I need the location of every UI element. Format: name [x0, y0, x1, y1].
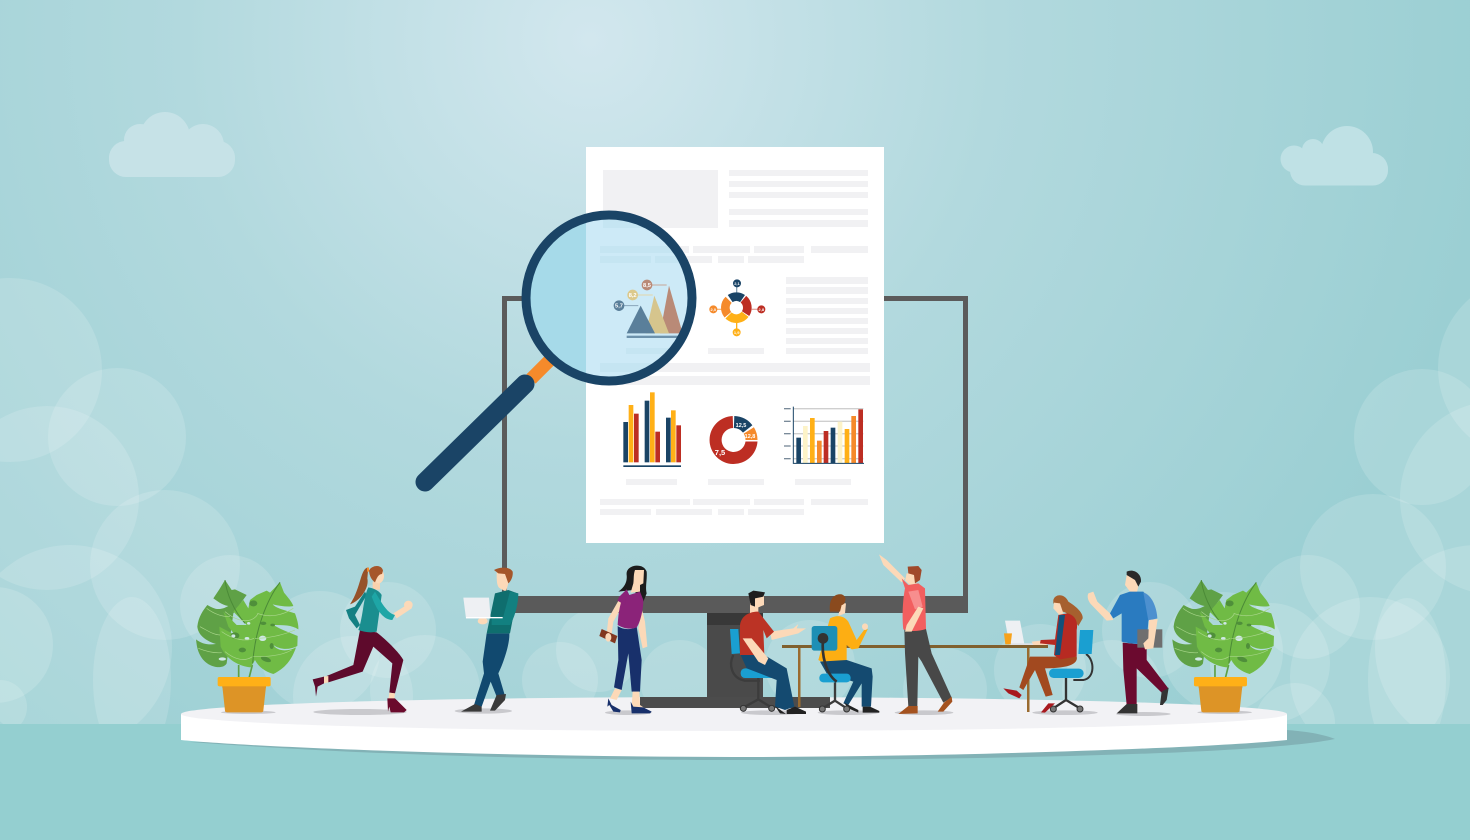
monitor frame [504, 298, 966, 600]
shadow [455, 708, 512, 714]
mountain chart: 8,5 [643, 283, 651, 289]
stand shadow [707, 613, 763, 625]
pants [904, 629, 952, 707]
donut chart [710, 416, 758, 464]
lens ring [526, 215, 692, 381]
shadow [895, 710, 953, 715]
monitor bezel bottom [502, 596, 968, 613]
shirt [902, 578, 926, 631]
donut chart: 12,8 [745, 434, 755, 440]
shoes [607, 698, 652, 713]
mountain chart: 5,7 [615, 304, 623, 310]
chair [812, 626, 851, 712]
table [782, 645, 1048, 712]
torso [487, 590, 518, 633]
pants [820, 660, 873, 707]
head [905, 573, 917, 585]
plant: right [1172, 580, 1275, 714]
arm raised [879, 554, 905, 582]
floor band [0, 724, 1470, 840]
plant: left [196, 580, 298, 714]
pants [1123, 643, 1168, 705]
shoes [844, 703, 879, 713]
head [838, 603, 846, 616]
shadow [818, 710, 879, 715]
platform shadow [190, 730, 1335, 760]
head [1125, 575, 1138, 593]
person: seated woman at laptop [1003, 595, 1098, 715]
lens [530, 220, 688, 376]
ring chart with callouts: 2,0 [711, 307, 717, 312]
chair [1049, 630, 1093, 712]
blazer [1040, 613, 1077, 659]
top [618, 589, 643, 629]
person: woman in purple [599, 566, 652, 715]
header text lines [600, 170, 868, 263]
ring chart with callouts: 1,9 [734, 330, 740, 335]
torso [358, 587, 382, 632]
person: seated man in yellow [812, 594, 879, 715]
lens lines [600, 210, 750, 385]
side text lines [600, 277, 870, 385]
shirt [1110, 592, 1150, 644]
shoes [1117, 688, 1169, 713]
shadow [741, 710, 802, 715]
shirt [818, 616, 868, 662]
arms [606, 595, 626, 641]
clutch [599, 629, 617, 643]
forearm [1143, 619, 1158, 649]
hands [1032, 640, 1047, 645]
cloud: left [109, 112, 235, 177]
folder [1137, 629, 1162, 648]
placeholder image [603, 170, 718, 228]
ponytail [350, 567, 368, 604]
person: man pointing at screen [879, 554, 953, 715]
shoes [898, 697, 952, 714]
person: man with laptop [455, 568, 518, 714]
head [750, 595, 764, 613]
legs [327, 630, 403, 693]
monitor [502, 298, 968, 708]
platform [181, 697, 1287, 757]
ring chart with callouts [709, 279, 765, 336]
head [497, 573, 508, 592]
handle collar [531, 361, 549, 379]
handle grip [425, 384, 525, 482]
laptop [1005, 621, 1024, 644]
ring chart with callouts: 2,1 [734, 281, 741, 286]
bubbles: background foliage [0, 276, 1470, 763]
shoes [387, 698, 407, 712]
raised arm [1088, 592, 1113, 621]
ring chart with callouts: 2,8 [759, 307, 765, 312]
column chart with axis [784, 407, 864, 463]
mountain chart [614, 280, 683, 338]
mountain chart: 8,2 [629, 293, 637, 299]
pants [474, 633, 509, 707]
laptop [463, 598, 491, 618]
donut chart: 7,5 [715, 448, 725, 457]
shadow [1116, 712, 1171, 716]
donut chart: 12,5 [736, 423, 746, 429]
person: man with folder [1088, 571, 1171, 716]
pants [1019, 657, 1077, 697]
grouped bar chart [623, 392, 681, 467]
person: running woman [313, 566, 413, 715]
arm [770, 624, 806, 640]
shoes [775, 706, 806, 714]
shadow [313, 709, 407, 715]
monitor base [640, 697, 830, 708]
coffee cup [1004, 633, 1012, 644]
shoes [461, 694, 506, 712]
chair [730, 629, 776, 711]
shoes [1003, 688, 1055, 713]
shirt [740, 612, 774, 655]
chart captions and footer lines [600, 479, 868, 515]
pants [741, 655, 794, 710]
shadow [1032, 710, 1098, 715]
report paper [586, 147, 884, 543]
monitor stand [707, 613, 763, 698]
cloud: right [1280, 126, 1388, 186]
hair [1053, 595, 1083, 626]
pants [614, 626, 642, 692]
shadow [605, 710, 652, 715]
magnifying glass [416, 210, 696, 492]
arm [393, 603, 412, 618]
hair [618, 566, 647, 602]
person: seated man in red [730, 591, 806, 715]
